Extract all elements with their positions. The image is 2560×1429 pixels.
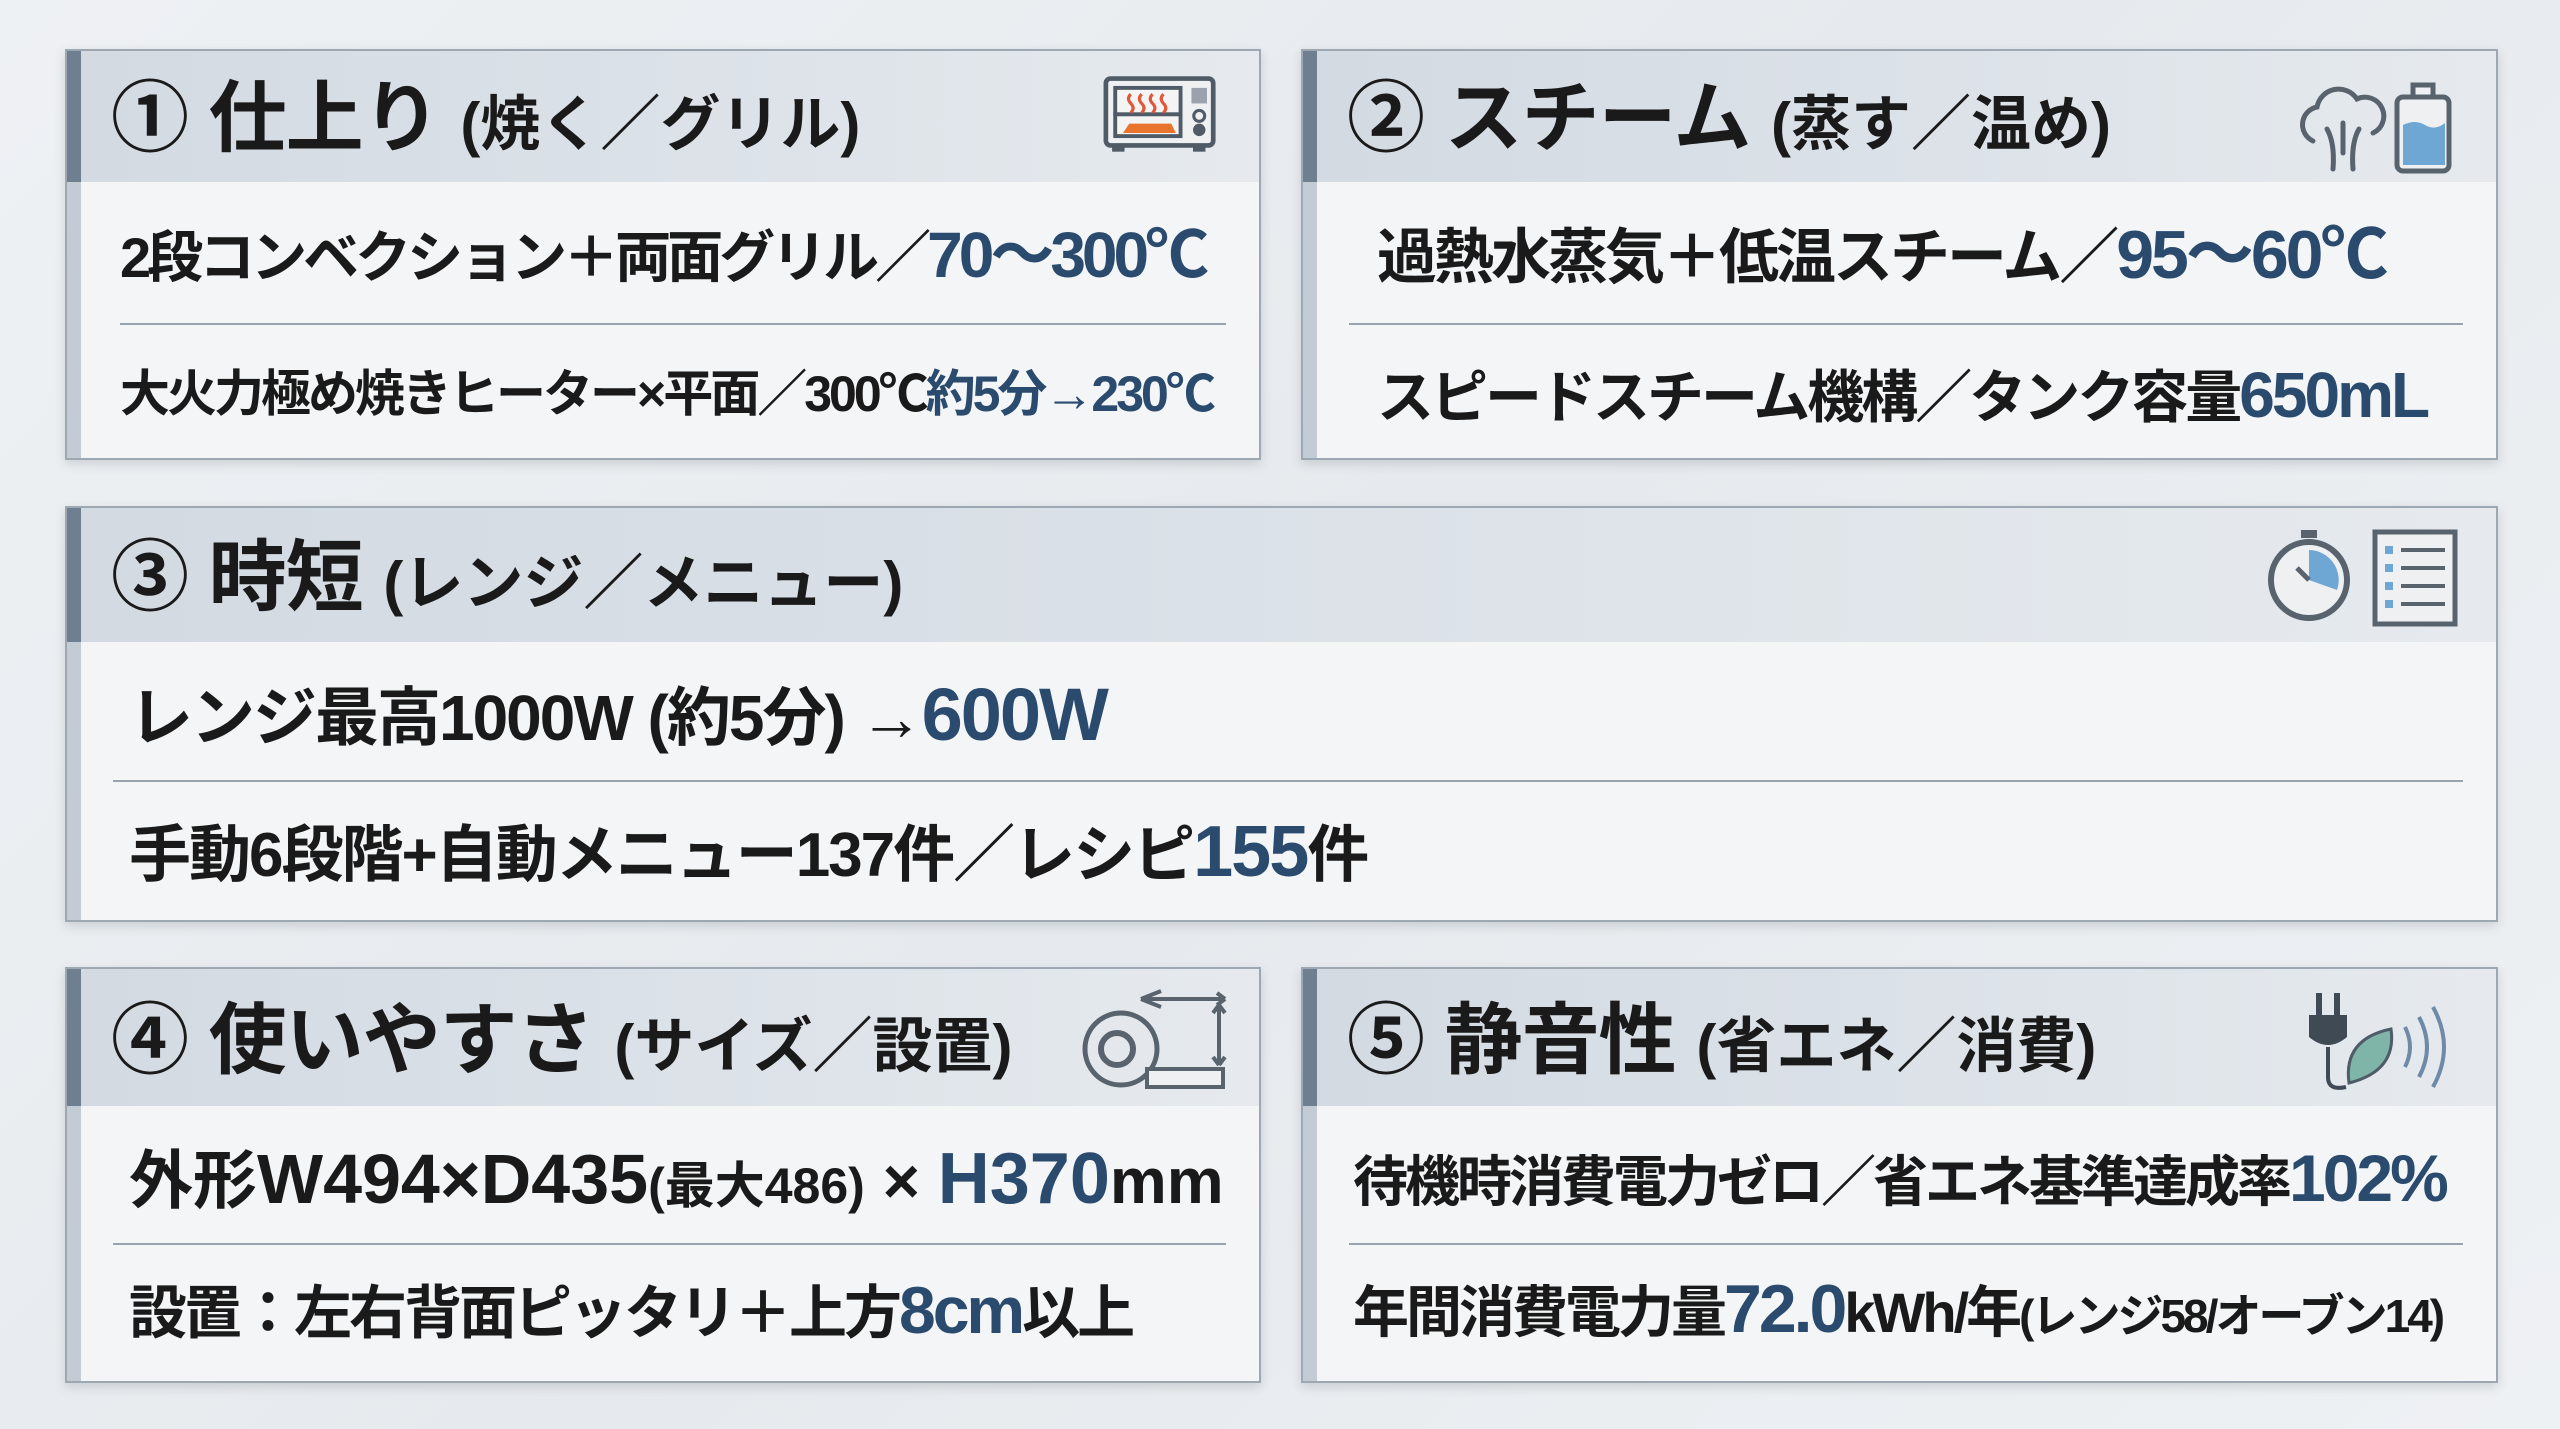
text: line 2: スピードスチーム機構／タンク容量650mL xyxy=(1377,359,2427,431)
panel: 1 finish xyxy=(65,49,1261,460)
text: line 2: 手動6段階+自動メニュー137件／レシピ155件 xyxy=(129,812,1367,892)
icon: steam and water tank xyxy=(2300,82,2452,174)
panel: 3 time saving xyxy=(65,506,2498,922)
panel: 2 steam xyxy=(1301,49,2498,460)
icon: plug, leaf, sound xyxy=(2309,993,2446,1090)
text: line 1: 2段コンベクション＋両面グリル／70～300℃ xyxy=(120,219,1205,291)
icon: oven xyxy=(1104,76,1216,152)
panel: 4 usability xyxy=(65,967,1261,1383)
text: line 2: 設置：左右背面ピッタリ＋上方8cm以上 xyxy=(129,1273,1132,1347)
text: line 1: 外形W494×D435(最大486) × H370mm xyxy=(129,1139,1224,1219)
heading 1: ① 仕上り (焼く／グリル) xyxy=(111,74,860,162)
panel: 5 quietness xyxy=(1301,967,2498,1383)
icon: timer and list xyxy=(2268,530,2458,626)
text: line 2: 年間消費電力量72.0kWh/年(レンジ58/オーブン14) xyxy=(1353,1271,2442,1347)
heading 3: ③ 時短 (レンジ／メニュー) xyxy=(111,533,903,621)
icon: tape measure xyxy=(1082,989,1226,1089)
text: line 2: 大火力極め焼きヒーター×平面／300℃約5分→230℃ xyxy=(120,366,1213,422)
text: line 1: レンジ最高1000W (約5分) →600W xyxy=(129,673,1107,756)
heading 4: ④ 使いやすさ (サイズ／設置) xyxy=(111,996,1013,1084)
heading 2: ② スチーム (蒸す／温め) xyxy=(1347,74,2111,162)
text: line 1: 過熱水蒸気＋低温スチーム／95～60℃ xyxy=(1377,217,2385,293)
text: line 1: 待機時消費電力ゼロ／省エネ基準達成率102% xyxy=(1353,1141,2446,1215)
heading 5: ⑤ 静音性 (省エネ／消費) xyxy=(1347,996,2096,1084)
